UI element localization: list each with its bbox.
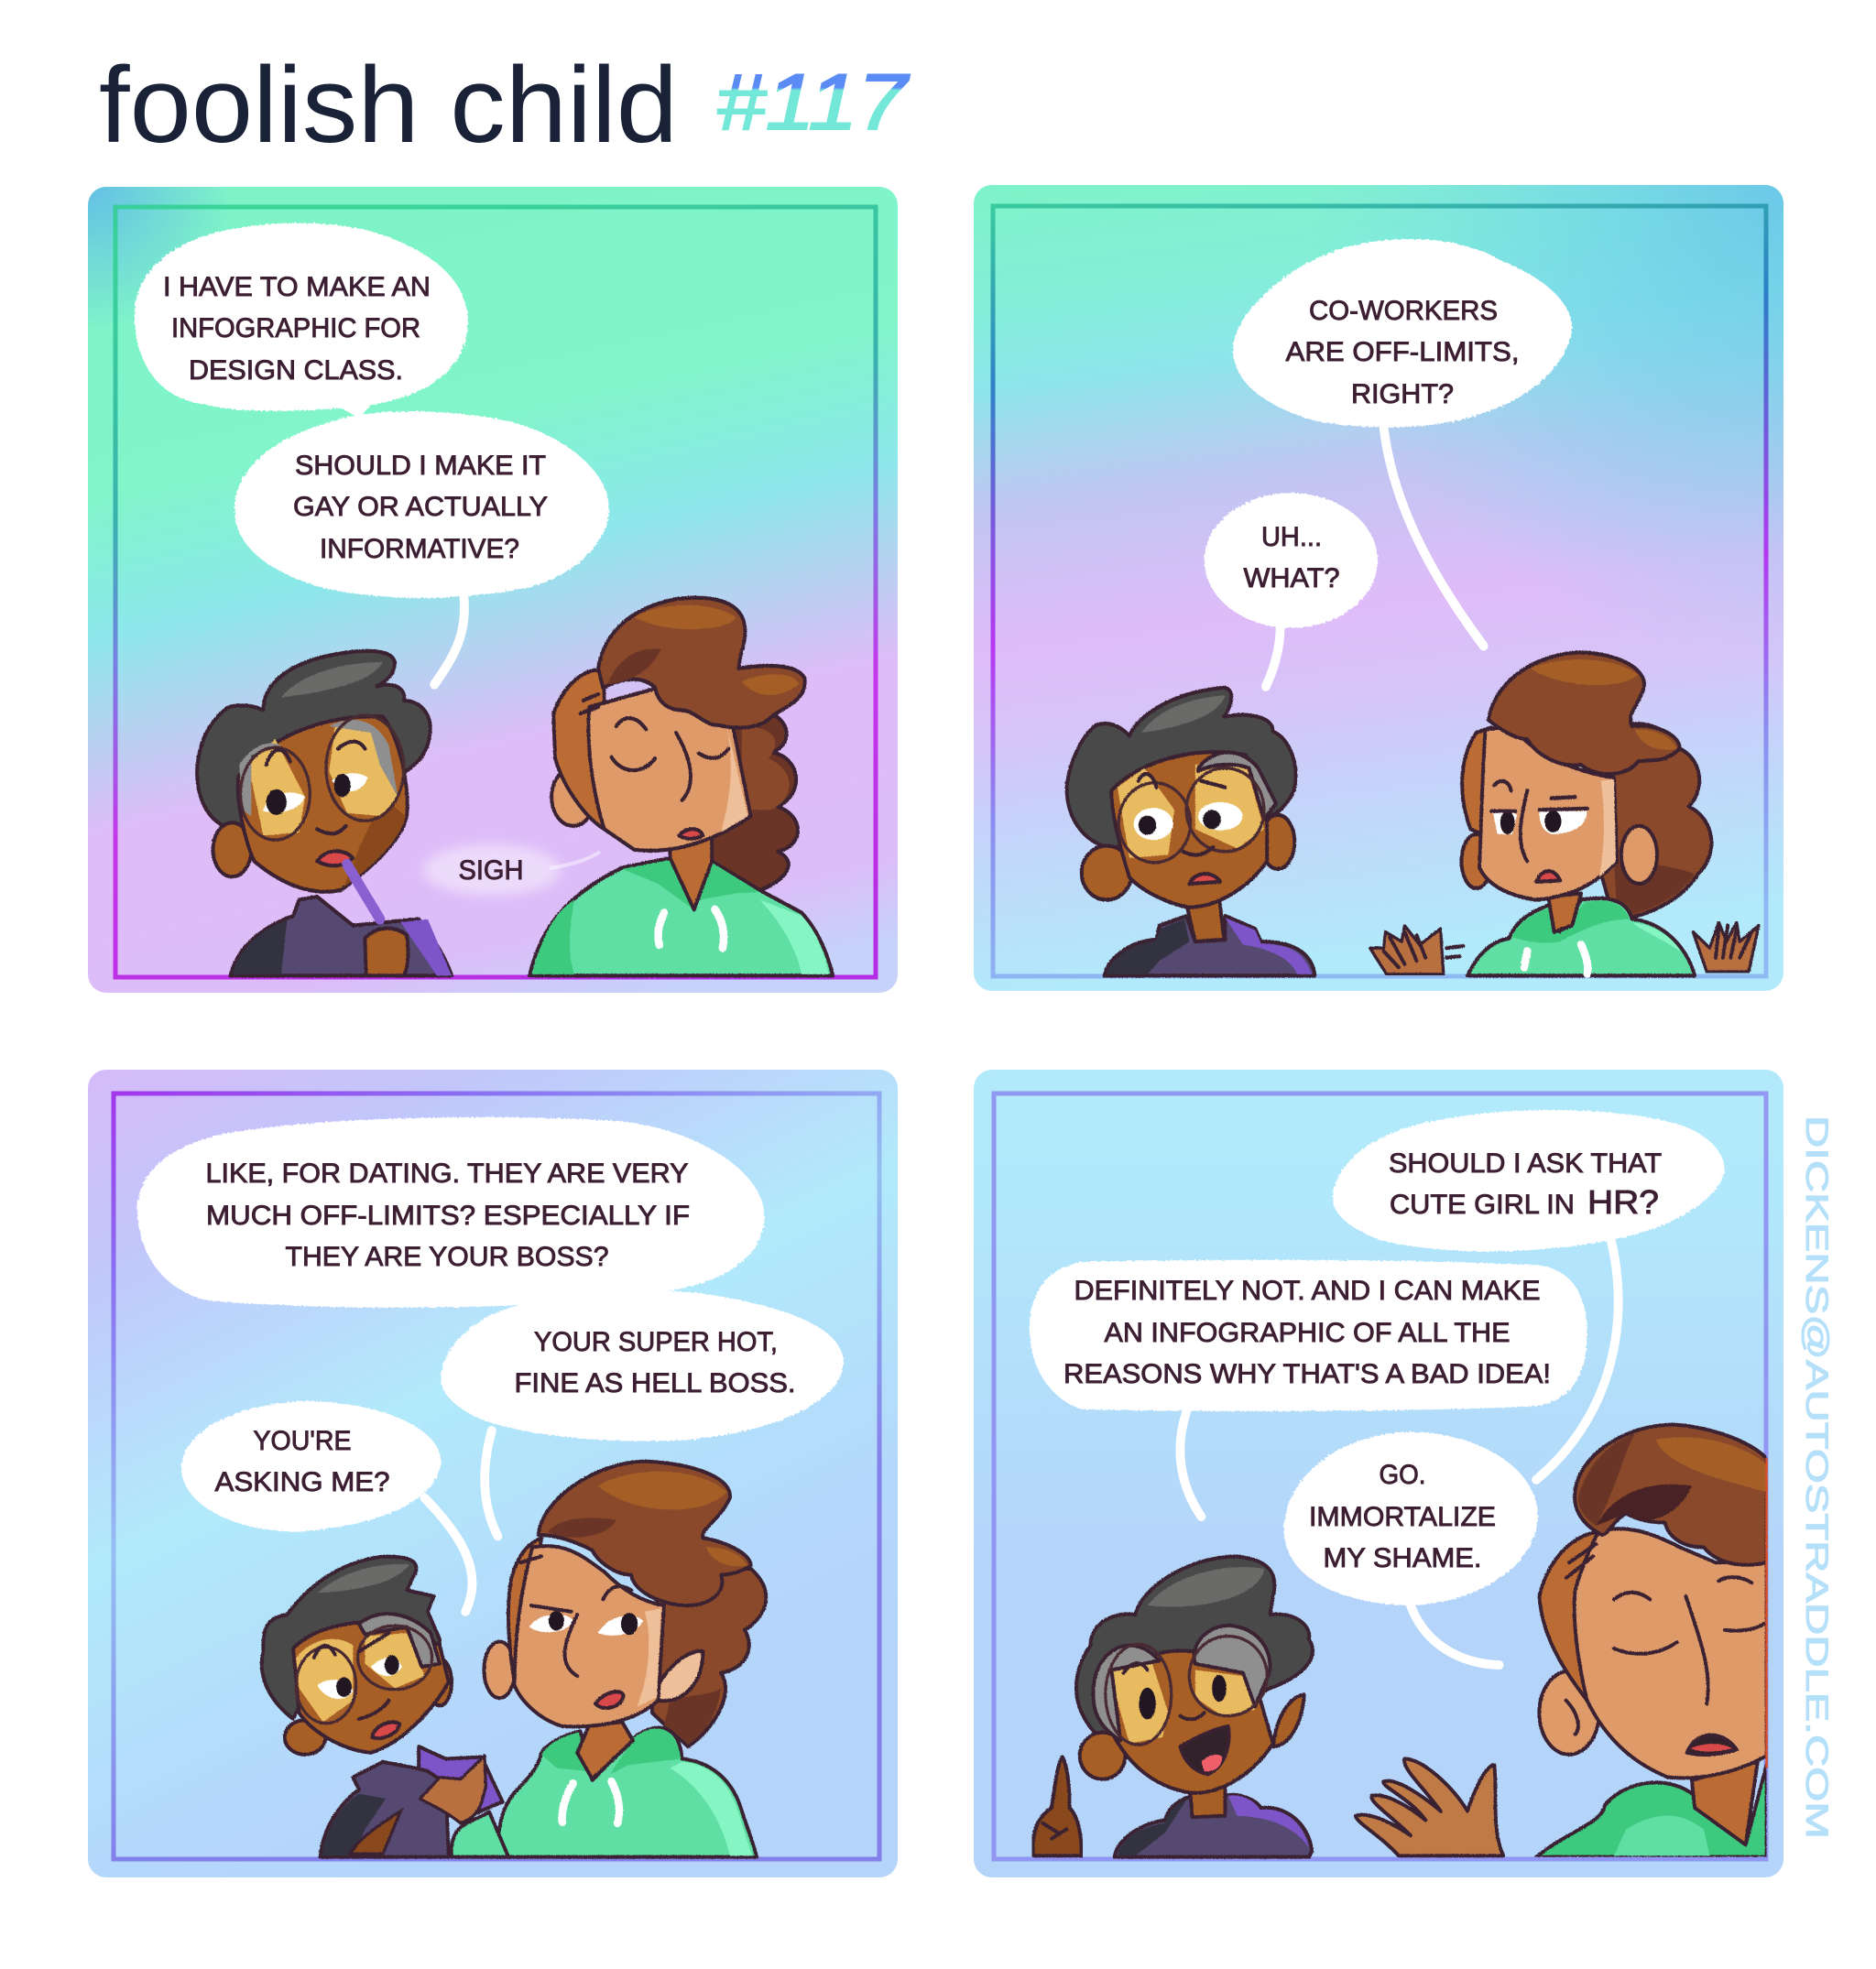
open hand bbox=[1356, 1759, 1503, 1855]
speech bubble: uh what bbox=[1205, 493, 1378, 687]
sigh bbox=[423, 844, 600, 896]
tall character with eyes closed bbox=[529, 598, 833, 975]
speech bubble: immortalize my shame: MY SHAME. bbox=[1323, 1543, 1482, 1573]
speech bubble: co-workers: CO-WORKERS bbox=[1309, 296, 1498, 326]
panel 2 bbox=[974, 185, 1783, 991]
panel 3 bbox=[88, 1070, 898, 1877]
speech bubble: like for dating: LIKE, FOR DATING. THEY ARE VERY bbox=[205, 1159, 689, 1189]
panel 4 background bbox=[974, 1070, 1783, 1877]
raised hand right bbox=[1693, 922, 1759, 972]
speech bubble: co-workers: RIGHT? bbox=[1351, 379, 1454, 409]
speech bubble: you're asking me: YOU'RE bbox=[253, 1426, 352, 1456]
speech bubble: immortalize my shame bbox=[1283, 1431, 1538, 1665]
panel 3 background bbox=[88, 1070, 898, 1877]
tall character in hoodie touching shoulder bbox=[484, 1462, 766, 1857]
speech bubble: infographic: I HAVE TO MAKE AN bbox=[163, 272, 431, 302]
speech bubble: should I make it gay bbox=[234, 411, 609, 684]
panel 1 bbox=[88, 187, 898, 993]
speech bubble: you're asking me bbox=[181, 1401, 473, 1612]
tall character eyes closed, close-up bbox=[1536, 1424, 1767, 1857]
speech bubble: infographic: INFOGRAPHIC FOR bbox=[171, 313, 420, 343]
speech bubble: super hot boss bbox=[441, 1290, 844, 1536]
raised finger hand bbox=[1033, 1757, 1082, 1855]
speech bubble: you're asking me: ASKING ME? bbox=[214, 1467, 390, 1497]
speech bubble: super hot boss: FINE AS HELL BOSS. bbox=[515, 1368, 795, 1398]
speech bubble: immortalize my shame: IMMORTALIZE bbox=[1309, 1502, 1496, 1532]
speech bubble: infographic bbox=[135, 223, 468, 418]
speech bubble: infographic: DESIGN CLASS. bbox=[189, 355, 403, 386]
speech bubble: immortalize my shame: GO. bbox=[1380, 1460, 1425, 1490]
speech bubble: cute girl in HR: SHOULD I ASK THAT bbox=[1389, 1148, 1662, 1179]
speech bubble: co-workers: ARE OFF-LIMITS, bbox=[1286, 337, 1519, 367]
speech bubble: like for dating: THEY ARE YOUR BOSS? bbox=[286, 1242, 608, 1272]
speech bubble: cute girl in HR: CUTE GIRL IN bbox=[1390, 1190, 1575, 1220]
speech bubble: definitely not: REASONS WHY THAT'S A BAD IDEA! bbox=[1063, 1359, 1551, 1389]
short character thinking with pen bbox=[197, 651, 452, 975]
speech bubble: should I make it gay: SHOULD I MAKE IT bbox=[295, 451, 546, 481]
speech bubble: super hot boss: YOUR SUPER HOT, bbox=[534, 1327, 778, 1357]
speech bubble: definitely not: DEFINITELY NOT. AND I CAN MAKE bbox=[1074, 1276, 1541, 1306]
speech bubble: cute girl in HR: HR? bbox=[1587, 1183, 1659, 1221]
speech bubble: should I make it gay: GAY OR ACTUALLY bbox=[293, 492, 548, 522]
speech bubble: uh what: UH... bbox=[1261, 522, 1322, 552]
speech bubble: co-workers bbox=[1233, 239, 1572, 646]
raised hand left bbox=[1370, 926, 1444, 974]
tall character sceptical with raised hands bbox=[1446, 652, 1711, 975]
speech bubble: cute girl in HR bbox=[1333, 1110, 1725, 1480]
short character being asked bbox=[262, 1556, 508, 1857]
short character excited with finger up bbox=[1076, 1556, 1313, 1857]
speech bubble: definitely not: AN INFOGRAPHIC OF ALL THE bbox=[1105, 1318, 1510, 1348]
short character surprised bbox=[1066, 688, 1314, 975]
speech bubble: like for dating bbox=[137, 1117, 765, 1308]
vertical credit text: DICKENS@AUTOSTRADDLE.COM bbox=[1799, 1115, 1834, 1839]
speech bubble: uh what: WHAT? bbox=[1244, 563, 1339, 593]
comic number: #117 bbox=[716, 59, 911, 147]
panel 4 bbox=[974, 1070, 1783, 1877]
speech bubble: should I make it gay: INFORMATIVE? bbox=[320, 534, 519, 564]
speech bubble: like for dating: MUCH OFF-LIMITS? ESPECIALLY IF bbox=[206, 1201, 690, 1231]
sigh: SIGH bbox=[458, 855, 524, 886]
panel 1 background bbox=[88, 187, 898, 993]
panel 2 background bbox=[974, 185, 1783, 991]
speech bubble: definitely not bbox=[1030, 1260, 1587, 1517]
title: foolish child bbox=[99, 45, 678, 166]
